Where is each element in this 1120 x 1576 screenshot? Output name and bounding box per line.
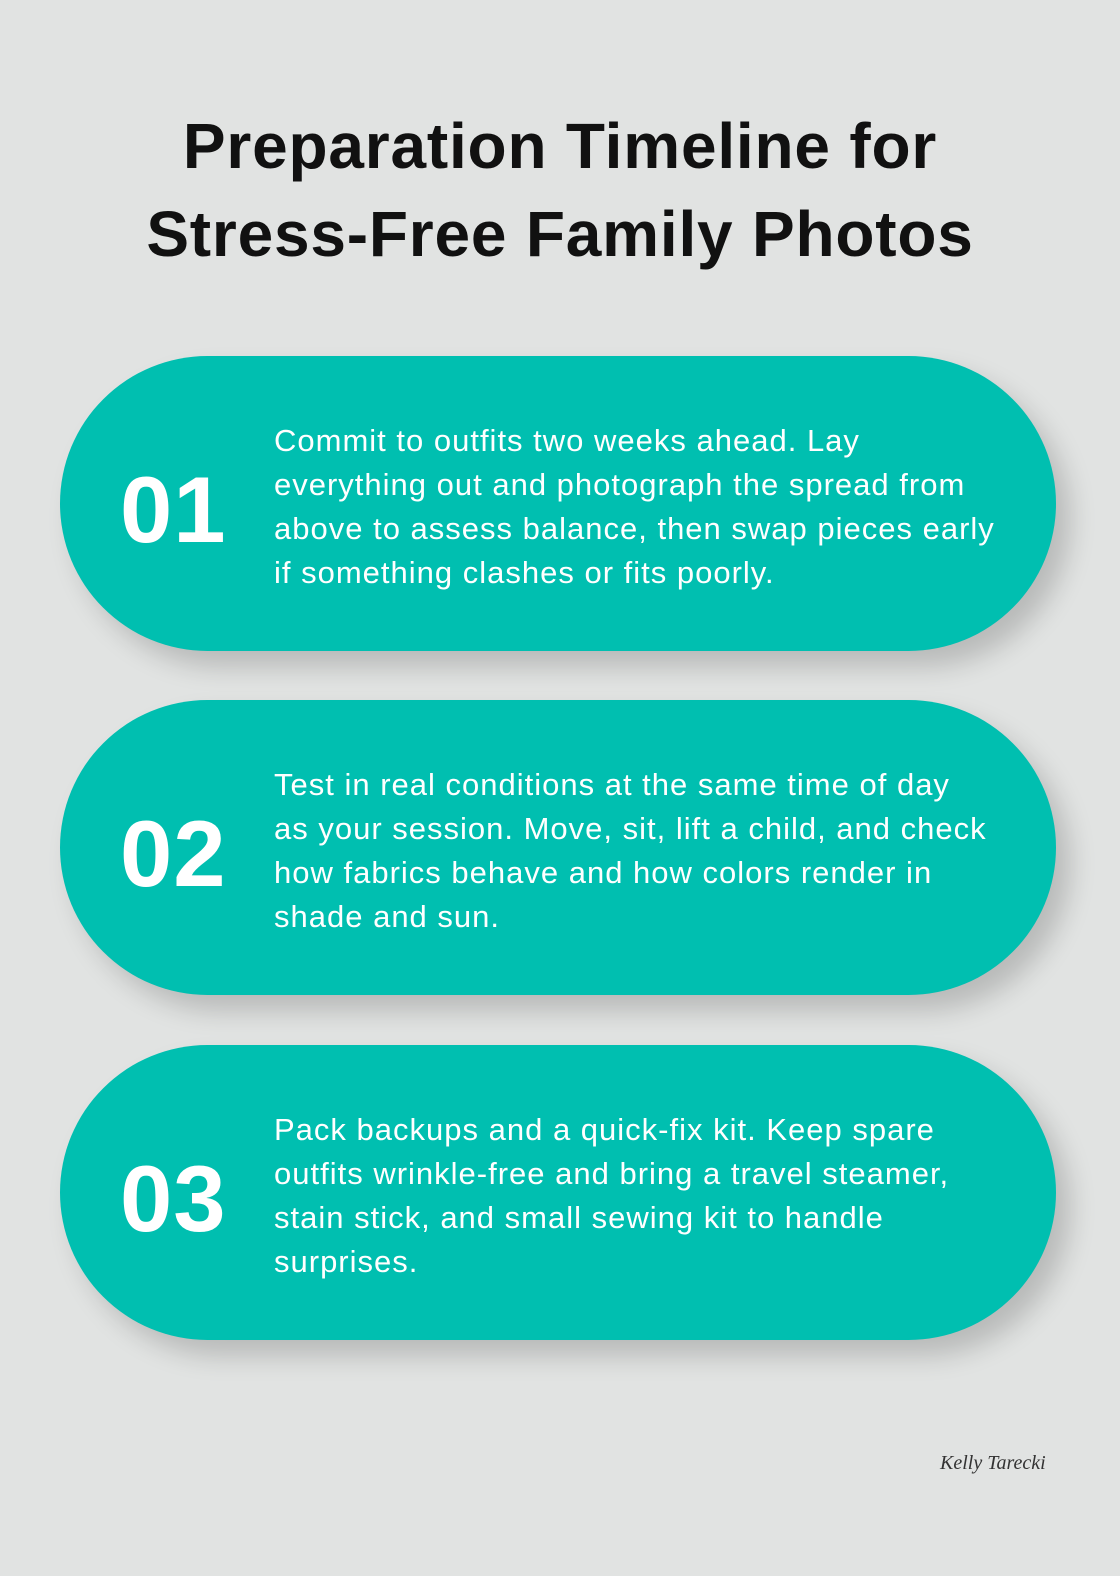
text 03: outfits wrinkle-free and bring a travel steamer, bbox=[274, 1156, 949, 1191]
text 03 bbox=[274, 1112, 949, 1279]
text 01: everything out and photograph the spread from bbox=[274, 467, 965, 502]
panel: step 02 bbox=[60, 700, 1056, 995]
text 03: surprises. bbox=[274, 1244, 418, 1279]
text 03: stain stick, and small sewing kit to handle bbox=[274, 1200, 884, 1235]
title: Preparation Timeline for bbox=[183, 110, 937, 182]
panel: step 03 bbox=[60, 1045, 1056, 1340]
text 03: Pack backups and a quick-fix kit. Keep spare bbox=[274, 1112, 935, 1147]
panel: step 01 bbox=[60, 356, 1056, 651]
text 01: if something clashes or fits poorly. bbox=[274, 555, 775, 590]
text 02: how fabrics behave and how colors render in bbox=[274, 855, 932, 890]
text 01 bbox=[274, 423, 995, 590]
text 02: Test in real conditions at the same time of day bbox=[274, 767, 950, 802]
text 01: above to assess balance, then swap pieces early bbox=[274, 511, 995, 546]
number 02: 02 bbox=[120, 801, 227, 906]
signature logo: Kelly Tarecki bbox=[940, 1452, 1046, 1474]
text 02: shade and sun. bbox=[274, 899, 500, 934]
text 01: Commit to outfits two weeks ahead. Lay bbox=[274, 423, 860, 458]
text 02: as your session. Move, sit, lift a child, and check bbox=[274, 811, 987, 846]
number 01: 01 bbox=[120, 457, 227, 562]
title bbox=[146, 110, 974, 270]
text 02 bbox=[274, 767, 987, 934]
number 03: 03 bbox=[120, 1146, 227, 1251]
title: Stress-Free Family Photos bbox=[146, 198, 974, 270]
